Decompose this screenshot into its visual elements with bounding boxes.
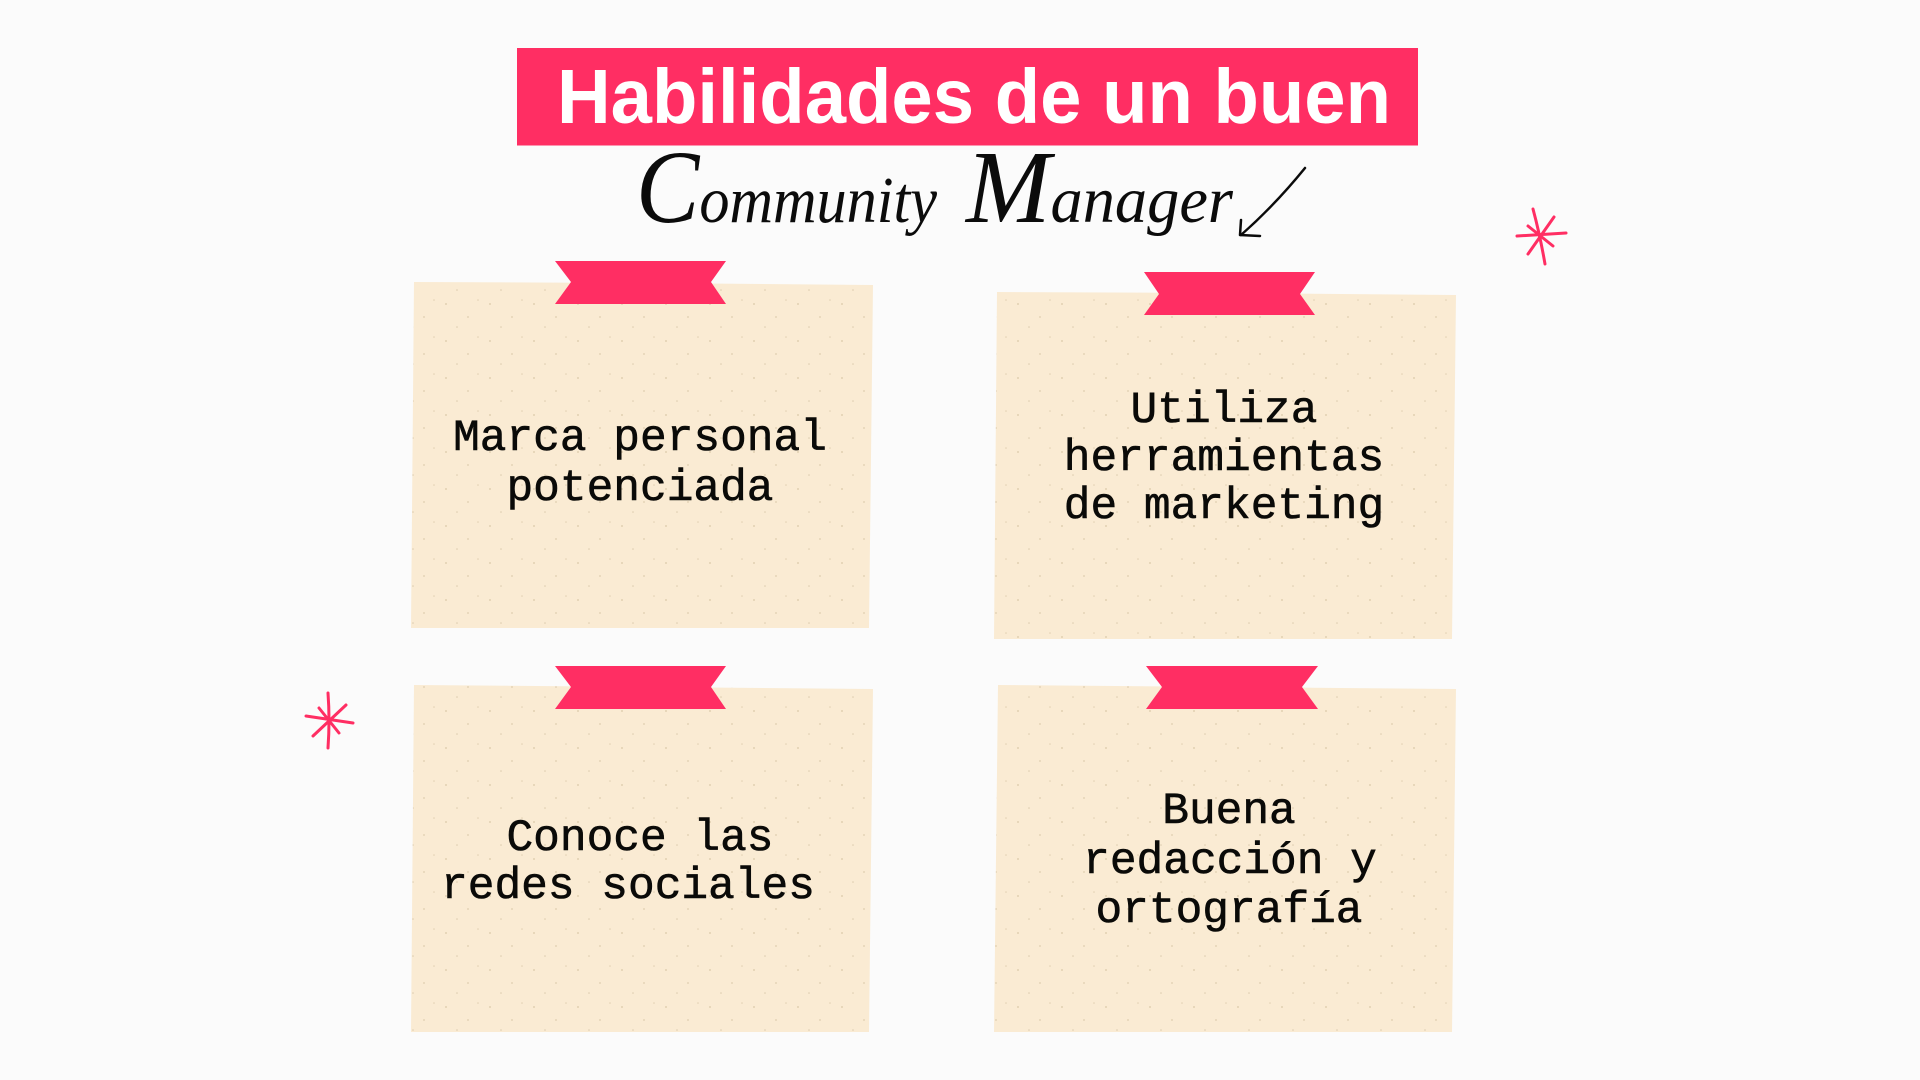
subtitle: Community Manager: Manager [964, 130, 1233, 245]
card text: potenciada [506, 464, 774, 514]
ribbon [555, 261, 726, 304]
card text: Utiliza [1131, 386, 1317, 436]
icon: pink asterisk bottom left [306, 693, 353, 748]
panel: Marca personal potenciada [411, 261, 873, 628]
panel: Utiliza herramientas de marketing [994, 272, 1456, 639]
card text: ortografía [1095, 886, 1363, 936]
subtitle: Community Manager: Community [636, 130, 938, 245]
card text: herramientas [1064, 434, 1384, 484]
card text: de marketing [1064, 482, 1384, 532]
title banner: Habilidades de un buen [557, 54, 1391, 140]
ribbon [1146, 666, 1318, 709]
ribbon [1144, 272, 1315, 315]
card text: Marca personal [453, 414, 827, 464]
card text: redes sociales [441, 862, 815, 912]
card text: Buena [1162, 787, 1296, 837]
panel: Buena redacción y ortografía [994, 666, 1456, 1032]
icon: arrow pointing down-left [1240, 168, 1305, 236]
subtitle: Community Manager [636, 130, 1233, 245]
ribbon [555, 666, 726, 709]
panel: Conoce las redes sociales [411, 666, 873, 1032]
icon: pink asterisk top right [1517, 209, 1566, 264]
card text: Conoce las [506, 814, 774, 864]
card text: redacción y [1083, 837, 1377, 887]
